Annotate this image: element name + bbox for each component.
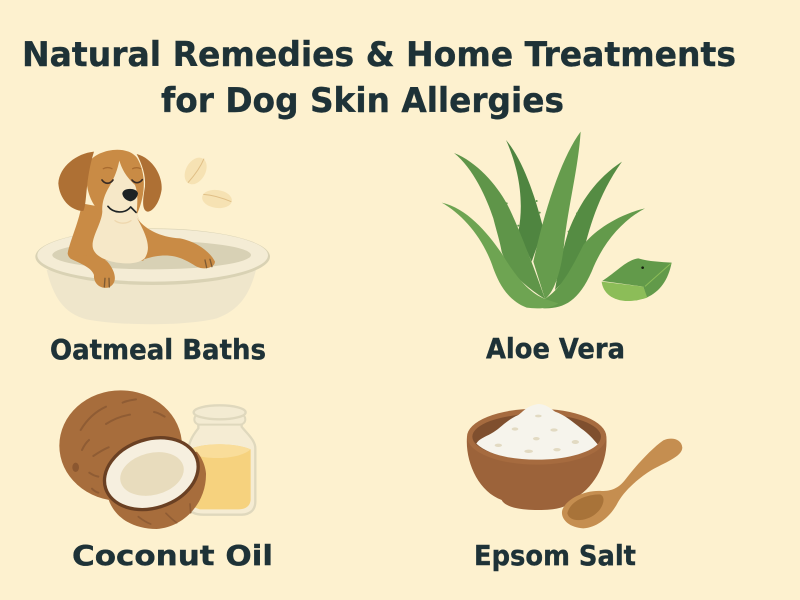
- tub body: [47, 270, 256, 324]
- whole coconut: [59, 390, 182, 501]
- coconut flesh: [95, 426, 208, 521]
- icon: dog in oatmeal bath: [35, 150, 270, 324]
- tub rim: [35, 228, 270, 285]
- oil jar: [188, 405, 255, 515]
- left back leaf: [454, 153, 545, 299]
- title: for Dog Skin Allergies: [161, 81, 564, 121]
- dog right ear: [137, 154, 162, 212]
- icon: aloe vera plant: [442, 132, 672, 308]
- coconut fibres: [81, 399, 165, 493]
- aloe slice: [602, 258, 672, 301]
- icon: coconut and oil jar: [59, 390, 255, 529]
- back centre leaf: [506, 140, 543, 262]
- dog muzzle and chest: [93, 161, 150, 263]
- dog far arm: [137, 217, 215, 268]
- title: [22, 35, 736, 121]
- right leaf: [543, 208, 645, 308]
- bowl body: [467, 437, 607, 510]
- icon: epsom salt bowl and spoon: [467, 404, 682, 528]
- oat flake one: [180, 154, 211, 188]
- coconut inner: [116, 446, 188, 502]
- dog nose: [122, 189, 138, 201]
- bath water: [52, 241, 251, 269]
- title: Natural Remedies & Home Treatments: [22, 35, 736, 75]
- oat flake two: [201, 188, 233, 210]
- dog body: [68, 203, 147, 262]
- halved coconut shell: [107, 452, 206, 529]
- label: coconut oil: Coconut Oil: [72, 539, 273, 572]
- salt pile: [476, 404, 598, 460]
- label: aloe vera: Aloe Vera: [486, 332, 625, 365]
- dog near arm: [70, 255, 115, 288]
- label: oatmeal baths: Oatmeal Baths: [50, 333, 266, 366]
- salt specks: [495, 415, 579, 453]
- left leaf: [442, 203, 558, 308]
- dog head: [86, 150, 144, 219]
- right back leaf: [555, 162, 622, 290]
- centre leaf: [533, 132, 581, 299]
- bowl rim: [467, 409, 606, 465]
- dog face: [102, 168, 142, 223]
- spoon: [562, 439, 682, 528]
- dog left ear: [58, 152, 94, 211]
- aloe spines: [506, 200, 578, 233]
- label: epsom salt: Epsom Salt: [474, 539, 636, 572]
